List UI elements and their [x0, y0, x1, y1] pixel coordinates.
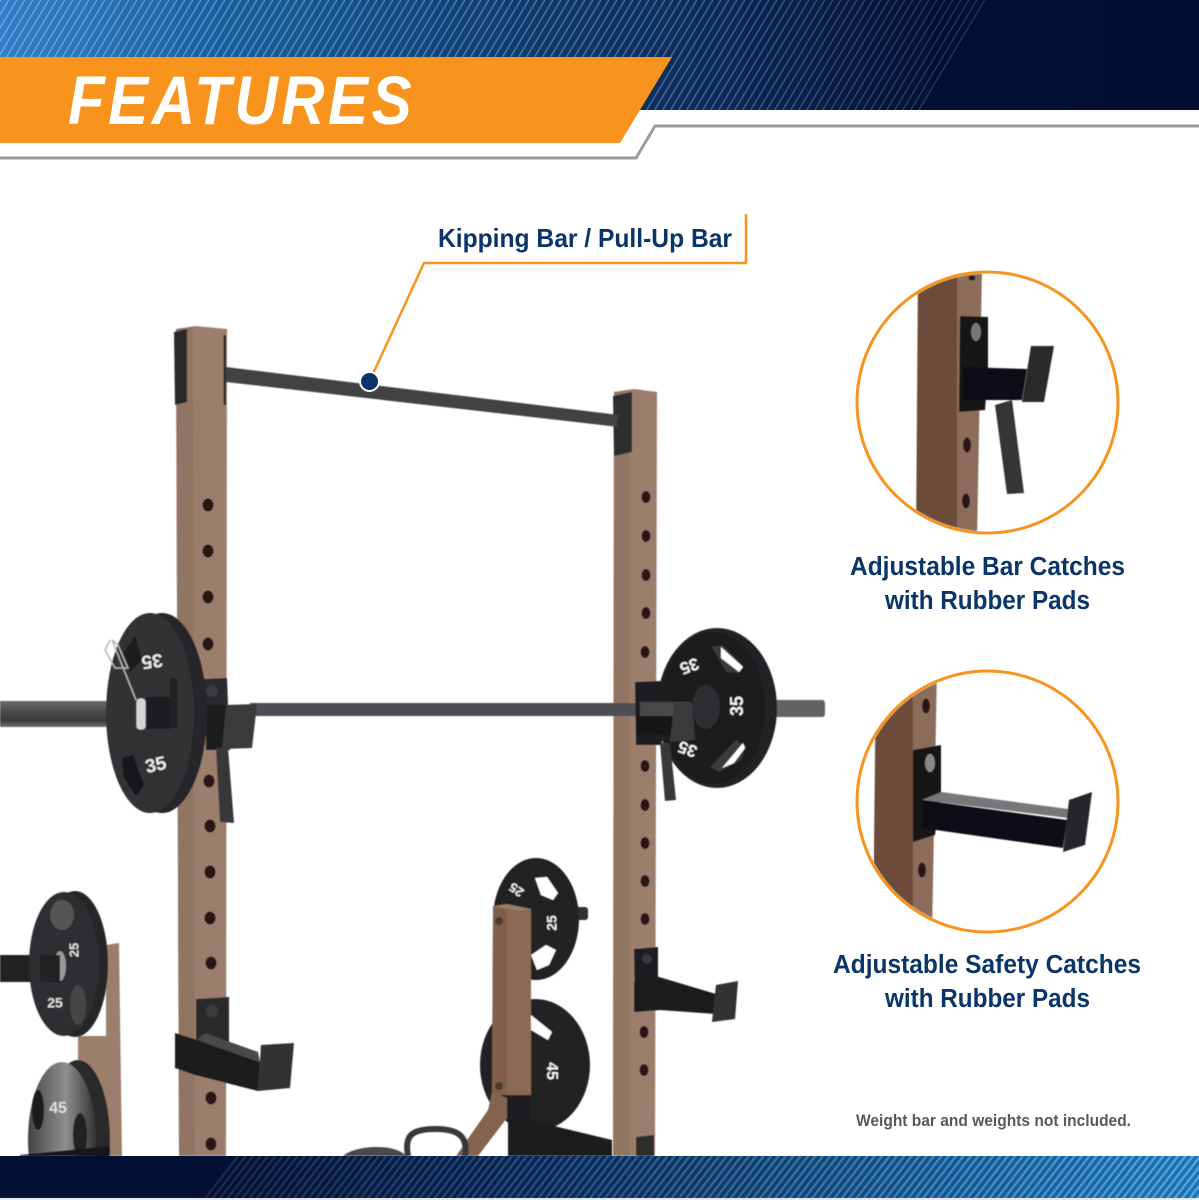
caption: bar catches: with Rubber Pads [884, 587, 1090, 615]
25 lb weight plate left: 25 [47, 995, 63, 1011]
25 lb weight plate left: 25 [66, 943, 81, 957]
centre 25 lb weight plate: 25 [544, 915, 560, 931]
kipping bar [226, 367, 631, 431]
left weight plate: 35 [140, 649, 164, 672]
disclaimer: Weight bar and weights not included. [856, 1112, 1131, 1130]
inset ring: safety catch [857, 671, 1118, 932]
45 lb weight plate left: 45 [49, 1100, 67, 1117]
header band [0, 0, 1199, 110]
inset photo: safety catch [873, 683, 1093, 918]
back right upright [613, 389, 657, 1156]
lower left safety catch [175, 997, 294, 1091]
squat rack photo [0, 326, 825, 1200]
centre 25 lb weight plate: 25 [506, 880, 527, 900]
header divider line [0, 126, 1199, 158]
centre plate storage post [492, 904, 531, 1095]
45 lb weight plate left [19, 1059, 110, 1156]
kettlebells [343, 1129, 466, 1156]
back left upright [174, 326, 227, 1156]
caption: bar catches: Adjustable Bar Catches [850, 553, 1125, 581]
footer band [0, 1156, 1199, 1200]
left weight plate [105, 613, 207, 813]
callout leader line [372, 214, 746, 376]
centre 25 lb weight plate [493, 858, 588, 980]
centre 45 lb weight plate: 45 [543, 1062, 560, 1080]
callout label: kipping bar: Kipping Bar / Pull-Up Bar [438, 223, 732, 253]
inset photo: bar catch [916, 270, 1054, 540]
inset ring: bar catch [857, 272, 1118, 533]
caption: safety catches: with Rubber Pads [884, 985, 1090, 1013]
left weight plate: 35 [143, 753, 169, 778]
caption: bar catches [850, 553, 1125, 615]
centre 45 lb weight plate [480, 999, 590, 1131]
callout marker dot [360, 372, 379, 391]
caption: safety catches [833, 951, 1141, 1013]
barbell [0, 700, 825, 727]
centre brace and arm [456, 1092, 612, 1156]
right weight plate: 35 [677, 654, 701, 678]
title: FEATURES [68, 61, 412, 139]
caption: safety catches: Adjustable Safety Catches [833, 951, 1141, 979]
lower left rack upright [78, 943, 122, 1156]
left bar catch [204, 678, 257, 823]
orange title banner [0, 57, 672, 143]
right bar catch [635, 681, 695, 801]
right weight plate: 35 [727, 696, 747, 716]
25 lb weight plate left [0, 891, 108, 1037]
right weight plate: 35 [676, 737, 700, 761]
right weight plate [657, 628, 777, 788]
right safety catch [634, 947, 738, 1022]
